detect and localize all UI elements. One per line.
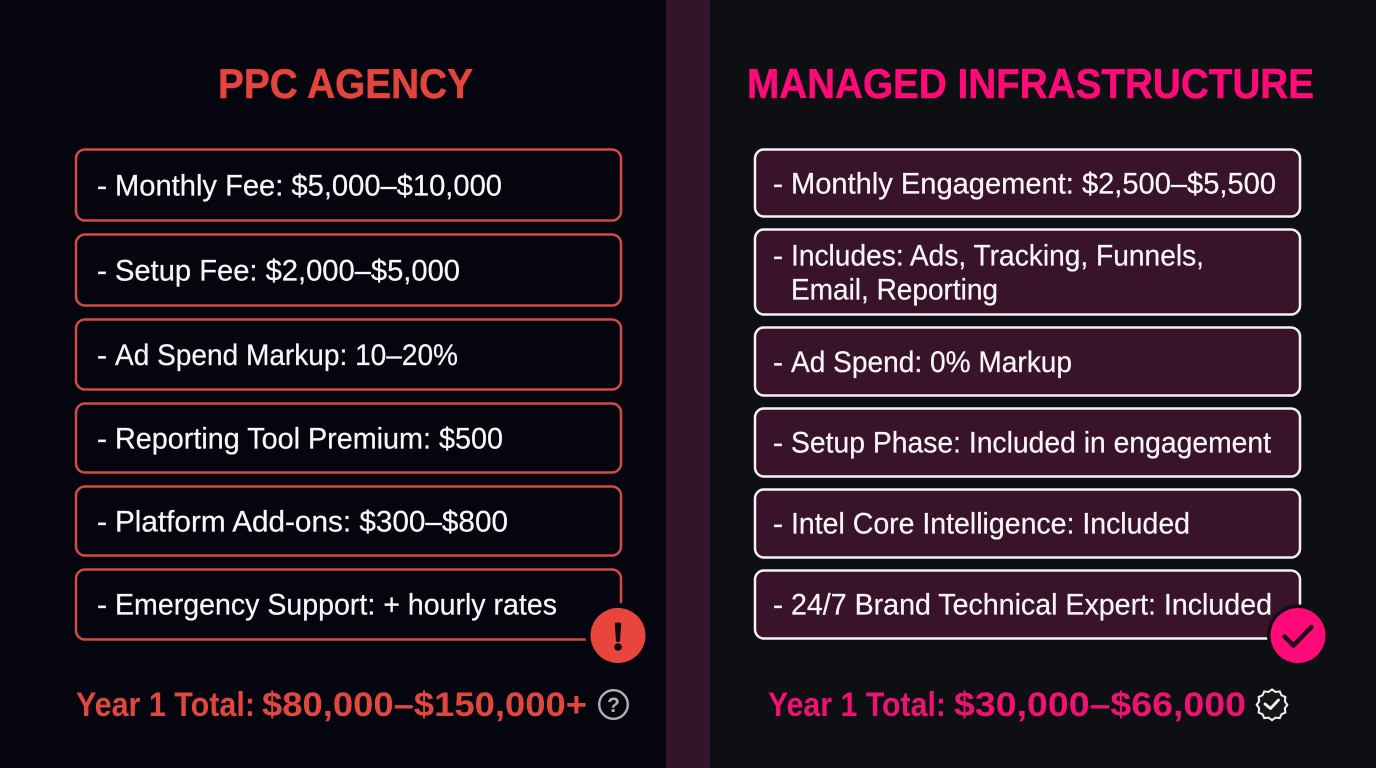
item: includes: -	[773, 240, 783, 272]
item: intel core intelligence: -	[773, 507, 783, 540]
item: reporting tool premium: Reporting Tool Premium: $500	[115, 422, 503, 455]
total: year 1 agency: $80,000–$150,000+	[262, 686, 587, 724]
item: reporting tool premium: -	[97, 422, 107, 455]
center divider band	[666, 0, 710, 768]
item: brand technical expert: -	[773, 588, 783, 621]
item: emergency support	[76, 570, 621, 640]
item: monthly engagement	[755, 150, 1300, 216]
total: year 1 agency: Year 1 Total:	[76, 686, 255, 724]
item: ad spend	[755, 328, 1300, 396]
icon: question mark	[599, 690, 628, 719]
total: year 1 agency	[76, 686, 587, 724]
item: monthly fee: Monthly Fee: $5,000–$10,000	[115, 169, 502, 202]
icon: warning badge	[586, 603, 650, 668]
item: setup fee: Setup Fee: $2,000–$5,000	[115, 254, 460, 287]
item: ad spend: Ad Spend: 0% Markup	[791, 346, 1072, 379]
heading: PPC Agency: PPC AGENCY	[218, 60, 473, 107]
item: setup fee: -	[97, 254, 107, 287]
icon: check badge	[1267, 604, 1329, 666]
item: reporting tool premium	[76, 404, 621, 472]
icon: question mark: ?	[607, 694, 620, 717]
item: includes: Includes: Ads, Tracking, Funnels,	[791, 240, 1204, 272]
item: ad spend markup	[76, 320, 621, 390]
icon: verified check	[1257, 689, 1287, 720]
heading: Managed Infrastructure: MANAGED INFRASTRUCTURE	[747, 60, 1314, 107]
item: brand technical expert: 24/7 Brand Technical Expert: Included	[791, 588, 1272, 621]
item: brand technical expert	[755, 570, 1300, 638]
item: intel core intelligence: Intel Core Intelligence: Included	[791, 507, 1190, 540]
item: setup fee	[76, 234, 621, 306]
item: includes: Email, Reporting	[791, 274, 998, 306]
item: platform add-ons: -	[97, 505, 107, 538]
item: includes	[755, 230, 1300, 314]
item: setup phase	[755, 408, 1300, 476]
item: emergency support: -	[97, 588, 107, 621]
item: ad spend: -	[773, 346, 783, 379]
total: year 1 managed	[768, 686, 1246, 724]
item: ad spend markup: Ad Spend Markup: 10–20%	[115, 339, 458, 372]
item: monthly engagement: Monthly Engagement: $2,500–$5,500	[791, 167, 1276, 200]
item: monthly fee	[76, 150, 621, 220]
item: platform add-ons: Platform Add-ons: $300–$800	[115, 505, 508, 538]
item: intel core intelligence	[755, 490, 1300, 558]
item: monthly engagement: -	[773, 167, 783, 200]
item: monthly fee: -	[97, 169, 107, 202]
item: setup phase: -	[773, 426, 783, 459]
panel: managed infrastructure	[747, 60, 1329, 724]
panel: PPC agency	[76, 60, 650, 724]
item: setup phase: Setup Phase: Included in engagement	[791, 426, 1272, 459]
item: platform add-ons	[76, 486, 621, 556]
item: emergency support: Emergency Support: + hourly rates	[115, 588, 557, 621]
total: year 1 managed: Year 1 Total:	[768, 686, 946, 724]
total: year 1 managed: $30,000–$66,000	[954, 686, 1246, 724]
item: ad spend markup: -	[97, 339, 107, 372]
